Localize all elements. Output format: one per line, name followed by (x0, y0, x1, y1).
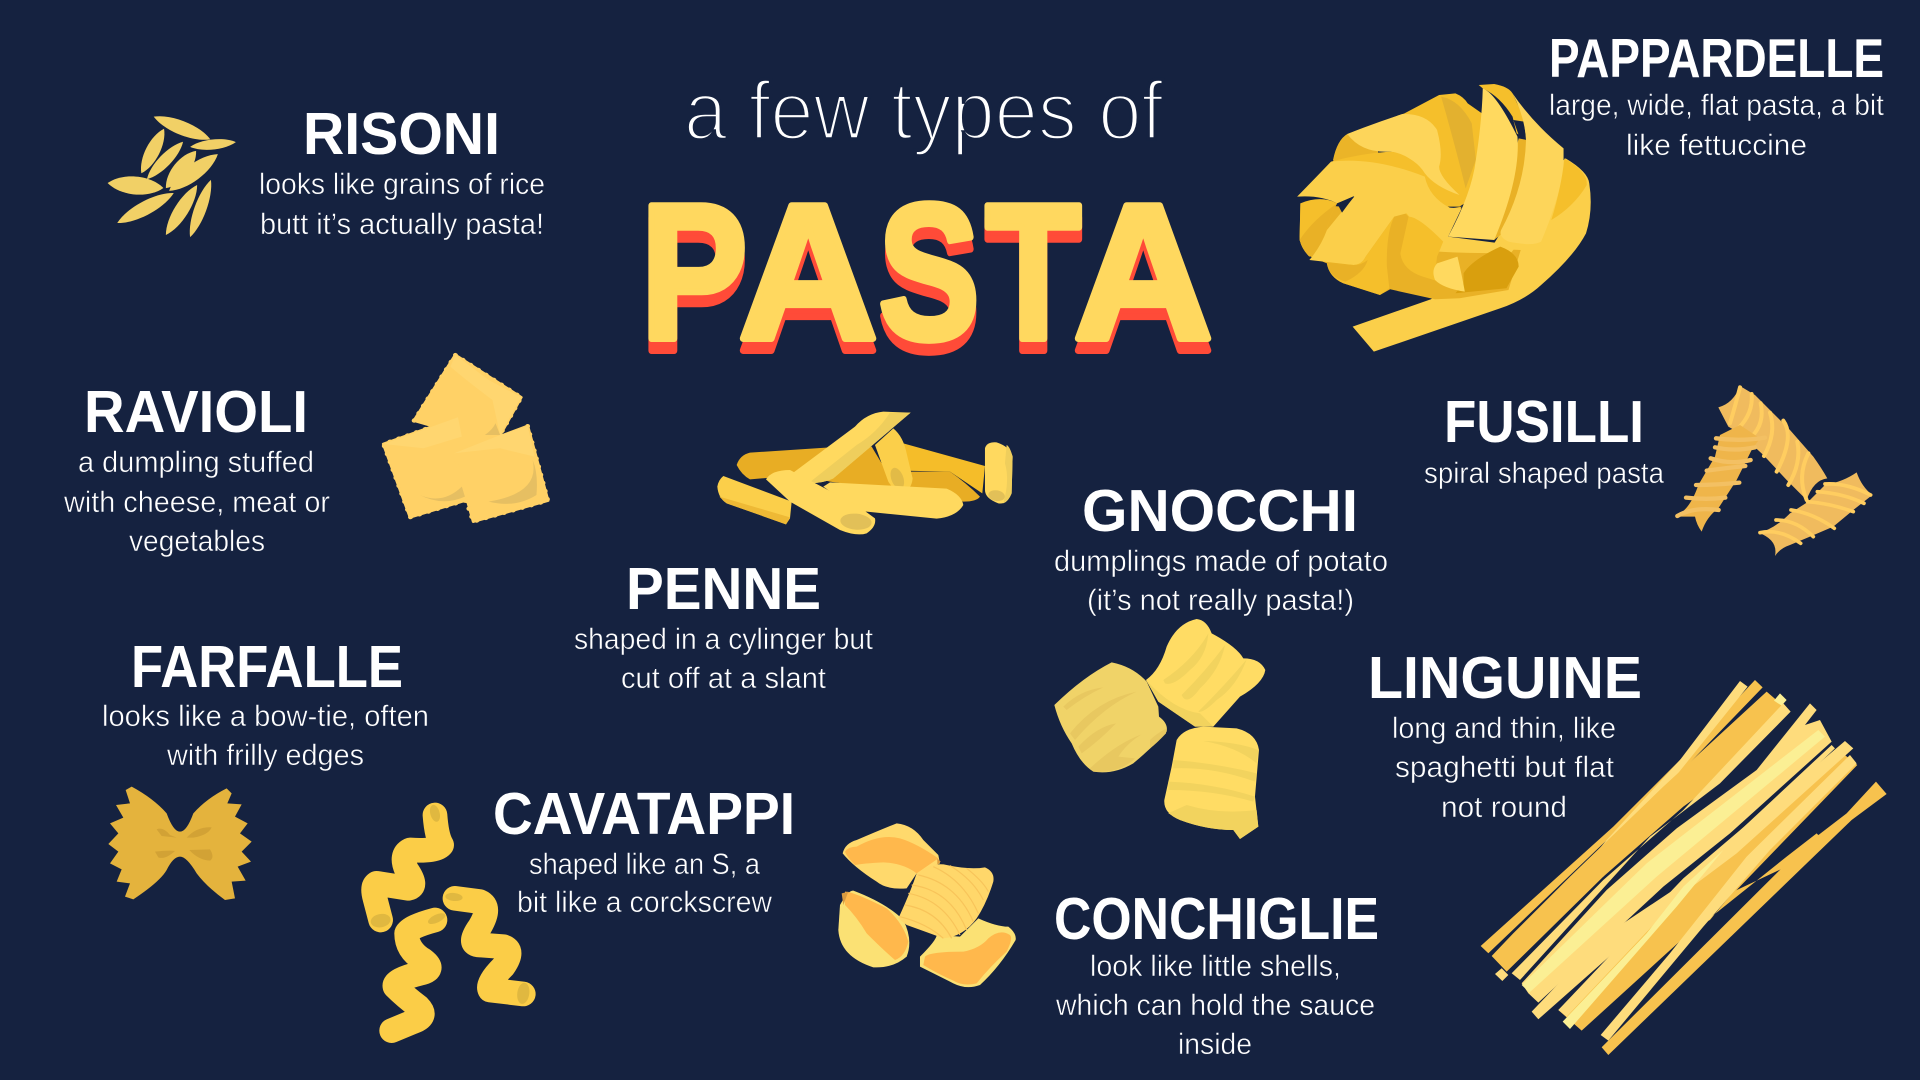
description: cavatappi: bit like a corckscrew (517, 886, 772, 919)
description: risoni: looks like grains of rice (259, 168, 545, 201)
title: PASTA shadow: T (986, 177, 1081, 392)
description: linguine: not round (1441, 791, 1567, 824)
heading: conchiglie: CONCHIGLIE (1054, 886, 1379, 952)
title (641, 64, 1213, 392)
heading: farfalle: FARFALLE (131, 634, 403, 700)
icon: cavatappi (370, 804, 531, 1031)
description: penne: cut off at a slant (621, 662, 827, 695)
title: PASTA (641, 163, 1213, 380)
description: penne: shaped in a cylinger but (574, 623, 874, 656)
description: ravioli: a dumpling stuffed (78, 446, 314, 479)
title: PASTA shadow: A (1074, 176, 1213, 392)
heading: risoni: RISONI (303, 101, 500, 167)
description: linguine: long and thin, like (1392, 712, 1616, 745)
icon: linguine (1481, 680, 1887, 1055)
description: linguine: spaghetti but flat (1395, 751, 1615, 784)
panel: pappardelle (1297, 27, 1885, 352)
icon: ravioli (383, 355, 548, 522)
description: ravioli: vegetables (129, 525, 265, 558)
description: farfalle: with frilly edges (166, 739, 364, 772)
description: cavatappi (517, 848, 772, 919)
panel: penne (574, 412, 1013, 695)
heading: linguine: LINGUINE (1368, 645, 1642, 711)
description: conchiglie: inside (1178, 1028, 1252, 1061)
description: pappardelle: like fettuccine (1626, 129, 1807, 162)
panel: gnocchi (1054, 478, 1388, 839)
title: PASTA shadow: P (641, 175, 747, 392)
panel: cavatappi (370, 781, 795, 1031)
description: conchiglie: look like little shells, (1090, 950, 1341, 983)
heading: ravioli: RAVIOLI (84, 379, 308, 445)
heading: gnocchi: GNOCCHI (1082, 478, 1358, 544)
panel: conchiglie (838, 823, 1379, 1061)
description: risoni: butt it’s actually pasta! (260, 208, 544, 241)
description: pappardelle: large, wide, flat pasta, a bit (1549, 89, 1885, 122)
description: pappardelle (1549, 89, 1885, 162)
description: farfalle (102, 700, 429, 772)
title: PASTA shadow: A (738, 176, 878, 392)
title: PASTA: A (738, 164, 878, 380)
icon: conchiglie (838, 823, 1016, 987)
icon: pappardelle (1297, 84, 1591, 352)
heading: penne: PENNE (626, 556, 821, 622)
panel: risoni (107, 101, 545, 241)
description: farfalle: looks like a bow-tie, often (102, 700, 429, 733)
description: conchiglie: which can hold the sauce (1055, 989, 1375, 1022)
panel: linguine (1368, 645, 1887, 1055)
title: PASTA: P (641, 163, 747, 380)
description: conchiglie (1055, 950, 1375, 1061)
heading: cavatappi: CAVATAPPI (493, 781, 795, 847)
panel: fusilli (1424, 386, 1872, 556)
description: cavatappi: shaped like an S, a (529, 848, 760, 881)
icon: gnocchi (1054, 619, 1265, 839)
description: gnocchi: dumplings made of potato (1054, 545, 1388, 578)
icon: fusilli (1675, 386, 1872, 556)
icon: farfalle (108, 787, 252, 900)
title: PASTA: T (986, 165, 1081, 380)
description: gnocchi: (it’s not really pasta!) (1087, 584, 1354, 617)
title: PASTA shadow (641, 175, 1213, 392)
description: risoni (259, 168, 545, 241)
icon: penne (717, 412, 1013, 534)
description: linguine (1392, 712, 1616, 824)
heading: fusilli: FUSILLI (1444, 389, 1644, 455)
panel: farfalle (102, 634, 429, 900)
title: a few types of: a few types of (684, 64, 1164, 157)
title: PASTA: A (1074, 164, 1213, 380)
description: penne (574, 623, 874, 695)
icon: risoni (107, 110, 236, 239)
panel: ravioli (63, 355, 548, 558)
description: gnocchi (1054, 545, 1388, 617)
title: PASTA shadow: S (878, 176, 980, 392)
description: ravioli: with cheese, meat or (63, 486, 330, 519)
description: ravioli (63, 446, 330, 558)
title: PASTA: S (878, 164, 980, 380)
description: fusilli: spiral shaped pasta (1424, 457, 1664, 490)
